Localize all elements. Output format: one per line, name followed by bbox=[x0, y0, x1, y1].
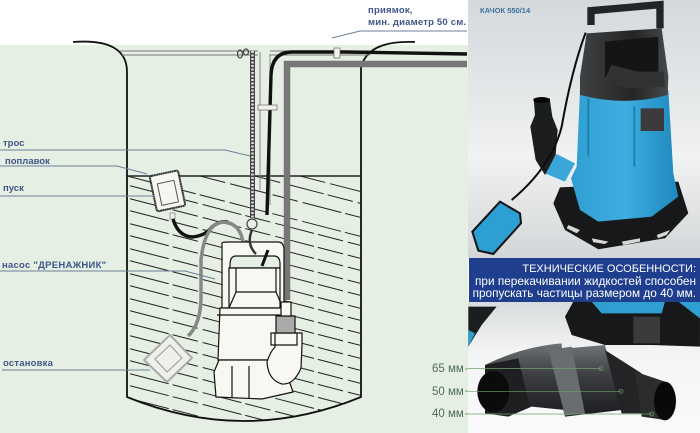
pump foot bbox=[553, 182, 688, 249]
cable clamp middle bbox=[258, 105, 277, 110]
float cable black bbox=[173, 219, 228, 237]
model name: КАЧОК 550/14 bbox=[480, 6, 531, 15]
labels: трос bbox=[3, 138, 24, 149]
background: pale green sheet bbox=[0, 45, 468, 433]
outlet elbow bbox=[267, 333, 302, 384]
banner: technical features bbox=[469, 258, 700, 302]
pump foot detail bbox=[565, 302, 700, 347]
top beam bbox=[120, 51, 370, 55]
leader lines bbox=[0, 31, 467, 370]
rope bbox=[250, 51, 255, 218]
labels: поплавок bbox=[5, 156, 50, 167]
dimension labels: 40 мм bbox=[432, 408, 464, 420]
lower float switch bbox=[144, 335, 192, 382]
labels bbox=[2, 5, 466, 369]
measure lines bbox=[465, 367, 654, 416]
labels: приямок, bbox=[368, 5, 413, 16]
float bbox=[472, 202, 521, 254]
hose end bbox=[468, 307, 497, 347]
rope loops bbox=[238, 49, 257, 229]
hook bbox=[250, 230, 256, 254]
labels: пуск bbox=[3, 183, 24, 194]
label plate bbox=[641, 108, 664, 131]
photo panel: pump bbox=[468, 0, 700, 260]
sump wall bbox=[73, 42, 415, 421]
cable bbox=[512, 33, 586, 200]
banner: technical features: при перекачивании жидкостей способен bbox=[475, 274, 696, 288]
water level bbox=[127, 175, 361, 177]
pump bbox=[214, 242, 302, 399]
dimension labels: 65 мм bbox=[432, 363, 464, 375]
dimension labels: 50 мм bbox=[432, 386, 464, 398]
discharge pipe bbox=[287, 64, 467, 300]
banner: technical features: ТЕХНИЧЕСКИЕ ОСОБЕННОСТИ: bbox=[522, 263, 696, 275]
cable clamp top bbox=[334, 48, 340, 58]
dimension labels bbox=[432, 363, 468, 420]
collar bbox=[563, 345, 621, 417]
pump base bbox=[214, 360, 293, 399]
cable guide pipe bbox=[260, 52, 270, 205]
pump body bbox=[229, 268, 280, 308]
pump handle bbox=[222, 242, 284, 308]
diagram: sump with pump bbox=[73, 42, 467, 432]
banner: technical features: пропускать частицы размером до 40 мм. bbox=[473, 286, 696, 300]
lower float cable bbox=[188, 222, 243, 336]
power cable bbox=[267, 52, 467, 215]
upper float switch bbox=[150, 170, 185, 219]
labels: остановка bbox=[3, 358, 54, 369]
labels: мин. диаметр 50 см. bbox=[368, 17, 466, 28]
hatching: water bbox=[128, 176, 360, 420]
reducer bbox=[605, 350, 645, 413]
pump blue body bbox=[571, 90, 678, 222]
black top bbox=[580, 28, 668, 101]
photo panel: outlet fitting bbox=[468, 302, 700, 420]
handle bbox=[591, 5, 660, 28]
outlet bbox=[545, 154, 575, 182]
elbow bbox=[485, 343, 565, 417]
body ribs bbox=[588, 98, 634, 167]
labels: насос "ДРЕНАЖНИК" bbox=[2, 260, 106, 271]
